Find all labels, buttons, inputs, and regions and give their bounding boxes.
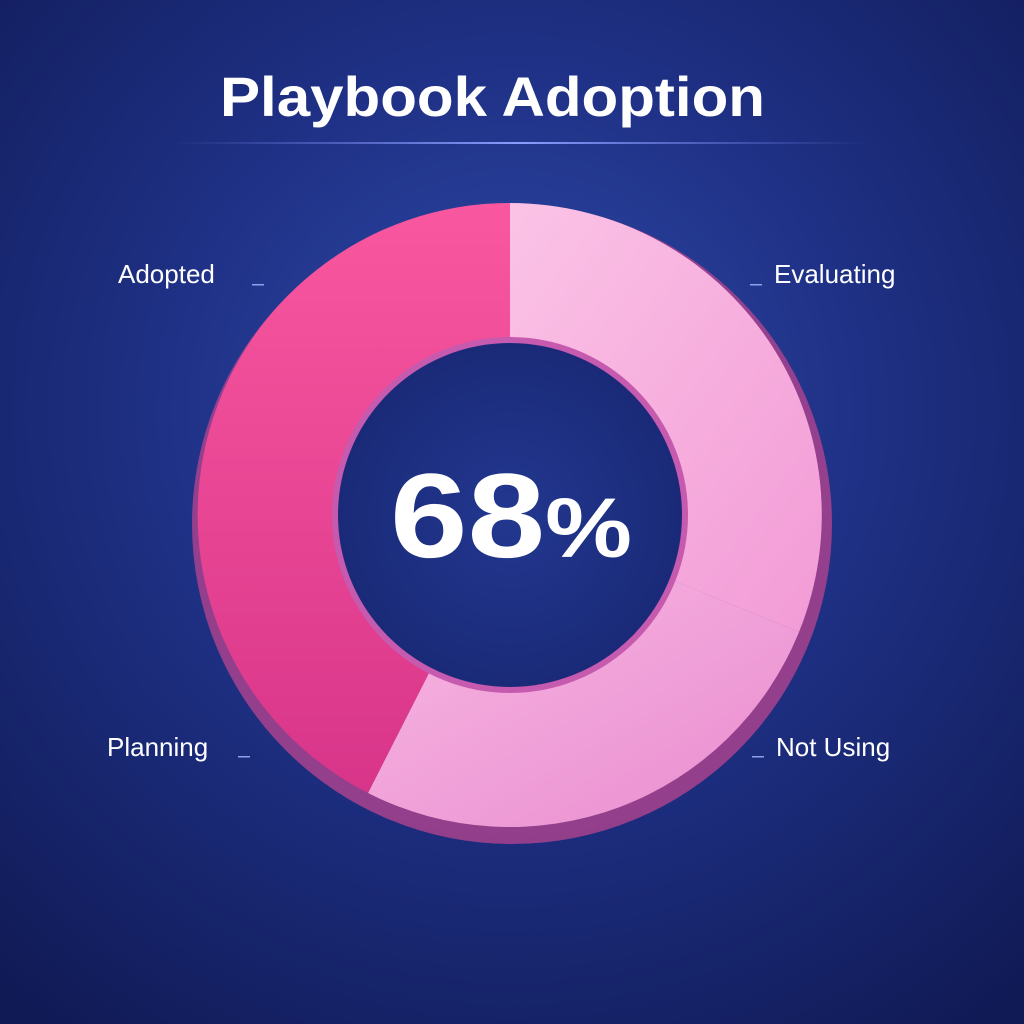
segment: evaluating [510,203,822,632]
segment: not using [368,580,799,827]
label: evaluating: Evaluating [774,259,895,289]
center value: 68 % [390,449,632,583]
label: not using: Not Using [776,732,890,762]
label: planning: Planning [107,732,208,762]
segment: adopted / planning [198,203,510,793]
title: Playbook Adoption [220,65,765,128]
label: adopted: Adopted [118,259,215,289]
donut chart [192,203,832,844]
